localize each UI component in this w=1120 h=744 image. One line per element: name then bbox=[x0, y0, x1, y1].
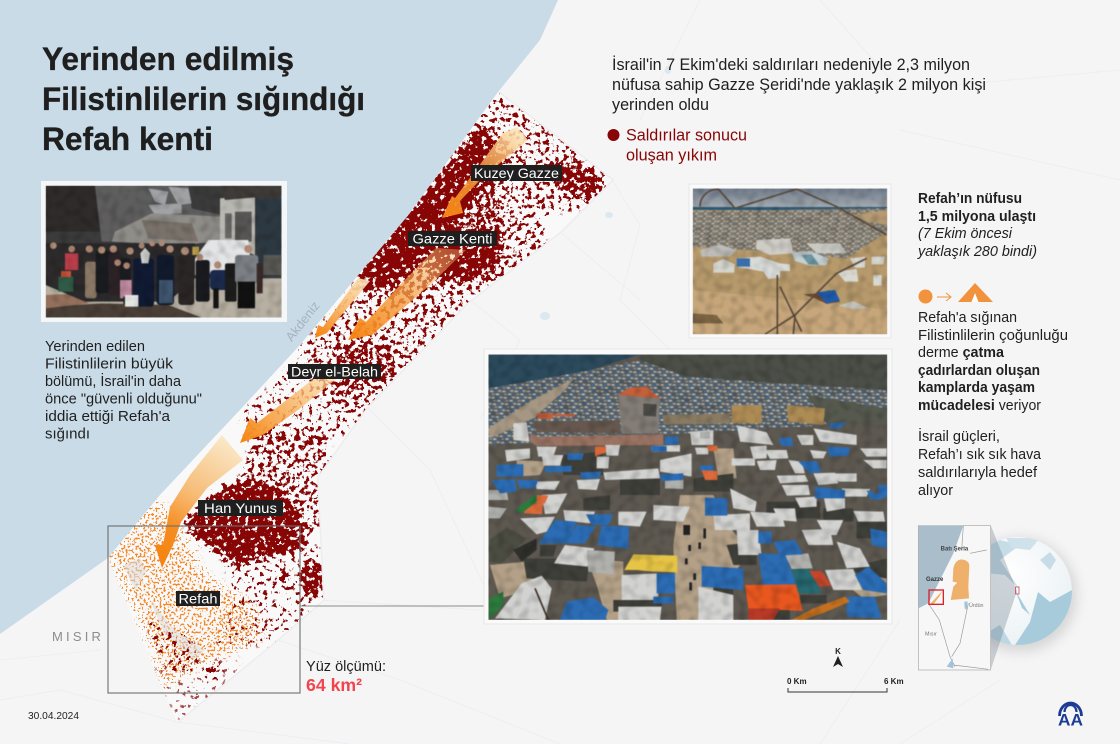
sea label: Akdeniz: Akdeniz bbox=[282, 298, 323, 344]
Gaza strip land bbox=[108, 92, 612, 722]
intro text: nüfusa sahip Gazze Şeridi'nde yaklaşık 2 milyon kişi bbox=[612, 76, 986, 94]
title: Refah kenti bbox=[42, 121, 213, 157]
arrow: Han Yunus to Refah bbox=[155, 435, 243, 568]
inset map: Gazze bbox=[926, 577, 944, 583]
label: Kuzey Gazze: Kuzey Gazze bbox=[474, 165, 559, 181]
text: air strikes bbox=[918, 427, 1042, 499]
intro text: yerinden oldu bbox=[612, 96, 709, 114]
surface area: Yüz ölçümü bbox=[306, 659, 386, 695]
date: 30.04.2024 bbox=[28, 710, 79, 722]
text: Refah population: Refah’ın nüfusu bbox=[918, 191, 1022, 207]
intro text bbox=[612, 55, 986, 114]
label: Gazze Kenti: Gazze Kenti bbox=[412, 230, 492, 246]
text: tents: mücadelesi veriyor bbox=[918, 398, 1041, 414]
text: tents: çadırlardan oluşan bbox=[918, 363, 1040, 379]
map scale and north arrow: 0 Km bbox=[787, 677, 807, 686]
label: Han Yunus: Han Yunus bbox=[204, 500, 277, 516]
arrow: Kuzey Gazze bbox=[442, 127, 528, 218]
text: displaced Palestinians: iddia ettiği Refah'a bbox=[45, 409, 171, 425]
legend: destruction: Saldırılar sonucu bbox=[626, 126, 747, 144]
text: displaced Palestinians: bölümü, İsrail'in daha bbox=[45, 372, 182, 390]
legend: destruction: oluşan yıkım bbox=[626, 146, 717, 164]
inset map: Mısır bbox=[925, 631, 937, 637]
photo: tents in the sand behind barbed wire bbox=[689, 184, 891, 338]
text: air strikes: Refah’ı sık sık hava bbox=[918, 447, 1042, 463]
intro text: İsrail'in 7 Ekim'deki saldırıları nedeniyle 2,3 milyon bbox=[612, 55, 970, 74]
text: displaced Palestinians: Yerinden edilen bbox=[45, 339, 145, 355]
surface area: Yüz ölçümü: Yüz ölçümü: bbox=[306, 659, 386, 675]
title: Yerinden edilmiş bbox=[42, 41, 294, 77]
text: Refah population: (7 Ekim öncesi bbox=[918, 226, 1013, 242]
text: Refah population: 1,5 milyona ulaştı bbox=[918, 209, 1036, 225]
text: tents: kamplarda yaşam bbox=[918, 380, 1035, 396]
globe shadow bbox=[964, 539, 1076, 651]
surface area: Yüz ölçümü: 64 km² bbox=[306, 675, 362, 695]
inset map: Ürdün bbox=[969, 602, 984, 609]
title bbox=[42, 41, 365, 157]
photo: aerial view of tent camp bbox=[484, 349, 892, 624]
locator cone bbox=[991, 526, 1017, 669]
text: displaced Palestinians: sığındı bbox=[45, 426, 90, 442]
urban Refah grey patches bbox=[124, 558, 205, 660]
text: tents: Filistinlilerin çoğunluğu bbox=[918, 328, 1068, 344]
map scale and north arrow bbox=[787, 647, 904, 692]
connector line to photo bbox=[300, 605, 486, 607]
map scale and north arrow: K bbox=[835, 647, 841, 656]
text: Refah population bbox=[917, 191, 1037, 260]
inset map bbox=[918, 526, 991, 670]
country label: Mısır: MISIR bbox=[52, 629, 104, 644]
map scale and north arrow: 6 Km bbox=[884, 677, 904, 686]
sea: Akdeniz bbox=[0, 0, 558, 634]
photo: displaced people walking among ruins bbox=[41, 181, 287, 322]
text: Refah population: yaklaşık 280 bindi) bbox=[917, 244, 1037, 260]
text: tents: derme çatma bbox=[918, 345, 1005, 361]
destruction map layer bbox=[150, 92, 612, 720]
text: displaced Palestinians: önce "güvenli olduğunu" bbox=[45, 392, 202, 408]
darker damage in Refah bbox=[145, 620, 200, 672]
text: displaced Palestinians: Filistinlilerin büyük bbox=[45, 356, 174, 372]
arrow: Deyr el-Belah bbox=[240, 370, 340, 443]
logo: AA: AA bbox=[1058, 710, 1083, 730]
text: tents: Refah'a sığınan bbox=[918, 310, 1017, 326]
displaced population dots in Refah bbox=[105, 500, 262, 685]
label: Deyr el-Belah: Deyr el-Belah bbox=[291, 364, 378, 380]
text: air strikes: İsrail güçleri, bbox=[918, 427, 1000, 445]
area box: Refah bbox=[108, 526, 300, 693]
label: Refah: Refah bbox=[178, 590, 218, 606]
inset map: Batı Şeria bbox=[941, 546, 969, 552]
text: air strikes: saldırılarıyla hedef bbox=[918, 465, 1038, 481]
icon: person to tent bbox=[918, 283, 993, 304]
text: air strikes: alıyor bbox=[918, 483, 953, 499]
arrow: small coastal bbox=[315, 278, 370, 338]
title: Filistinlilerin sığındığı bbox=[42, 81, 365, 117]
legend: destruction bbox=[608, 126, 747, 164]
text: displaced Palestinians bbox=[45, 339, 202, 442]
arrow: Gazze Kenti bbox=[348, 248, 466, 340]
locator: globe and inset map bbox=[918, 526, 1076, 670]
text: tents bbox=[918, 310, 1068, 414]
globe bbox=[991, 537, 1072, 645]
